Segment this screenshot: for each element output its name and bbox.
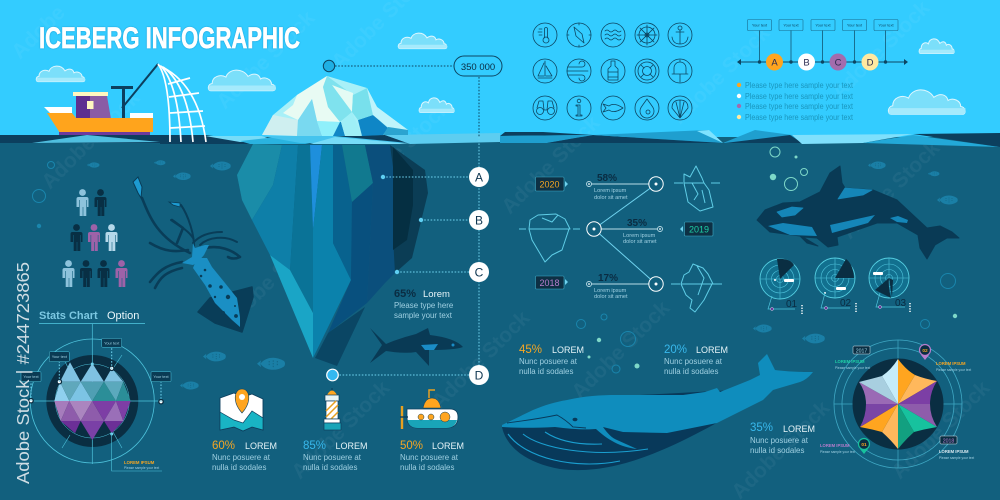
legend list: Please type here sample your text (745, 92, 854, 101)
icon: compass (567, 23, 591, 47)
point C: C (475, 266, 484, 280)
tree chart: years and percentages: Lorem ipsum (594, 188, 627, 194)
icon: ship wheel (635, 23, 659, 47)
ocean background (0, 137, 1000, 500)
stat: 50%: nulla id sodales (400, 463, 454, 472)
radial star chart: Please sample your text (939, 456, 974, 460)
text block: 20%: 20% (664, 344, 687, 356)
timeline A B C D (737, 20, 908, 70)
timeline A B C D: D (867, 58, 874, 68)
point D: D (475, 368, 484, 382)
timeline A B C D: Your text (847, 22, 863, 28)
point A (381, 167, 489, 187)
text block: 35%: 35% (750, 422, 773, 434)
tree chart: years and percentages: 2019 (689, 224, 709, 234)
text block: 45% (519, 344, 584, 376)
tree chart: years and percentages: 17% (598, 273, 618, 284)
label: 350 000 (454, 56, 502, 76)
radial star chart: Please sample your text (835, 366, 870, 370)
icon: life ring (635, 59, 659, 83)
legend list: Please type here sample your text (745, 113, 854, 122)
text block: 65% Lorem (394, 288, 454, 320)
text block: 45%: Nunc posuere at (519, 357, 578, 366)
stat: 50%: 50% (400, 440, 423, 452)
sky background (0, 0, 1000, 137)
text block: 20%: nulla id sodales (664, 367, 718, 376)
radar 02: 02 (840, 298, 852, 309)
icon: shell (668, 96, 692, 120)
watermark: Adobe Stock (837, 136, 945, 244)
timeline A B C D: Your text (815, 22, 832, 28)
stat: 60%: 60% (212, 440, 235, 452)
watermark: Adobe Stock (37, 86, 145, 194)
tuna (370, 328, 463, 366)
stat: 50%: LOREM (432, 441, 464, 451)
iceberg outline left (519, 214, 580, 262)
watermark: Adobe Stock (887, 376, 995, 484)
radial iceberg stats chart: Your text (52, 354, 68, 359)
legend list (737, 81, 854, 122)
stock watermark vertical: Adobe Stock | #244723865 (13, 262, 33, 484)
orca (757, 166, 959, 259)
cloud 3 (398, 33, 447, 49)
stat: 60%: LOREM (245, 441, 277, 451)
icon: map (220, 389, 263, 431)
radial iceberg stats chart: Your text (23, 374, 40, 379)
stat: 50% (400, 440, 464, 472)
tree chart: years and percentages: 58% (597, 173, 617, 184)
radial star chart: LOREM IPSUM (939, 449, 969, 454)
radial star chart: LOREM IPSUM (820, 443, 850, 448)
radar 03: 03 (895, 298, 907, 309)
tree chart: years and percentages: dolor sit amet (594, 294, 628, 300)
radial star chart: 01 (861, 442, 867, 448)
radar 01 (760, 259, 802, 314)
label: 350 000: 350 000 (461, 62, 495, 73)
stat: 60%: nulla id sodales (212, 463, 266, 472)
point B: B (475, 214, 483, 228)
stat: 85%: 85% (303, 440, 326, 452)
radial star chart: LOREM IPSUM (936, 361, 966, 366)
text block: 65% Lorem: Please type here (394, 301, 454, 310)
cloud 6 (888, 90, 965, 114)
text block: 65% Lorem: sample your text (394, 311, 453, 320)
radial iceberg stats chart: Please sample your text (124, 466, 159, 470)
iceberg outline top (674, 166, 720, 211)
icon: sailboat (533, 59, 557, 83)
watermark: Adobe Stock (212, 6, 320, 114)
watermark: Adobe Stock (427, 306, 535, 414)
fishing boat with net (44, 64, 206, 142)
radar 03 (869, 258, 910, 312)
radar 02 (815, 258, 856, 312)
stats chart heading: Option (107, 310, 139, 322)
icon: info (567, 96, 591, 120)
tree chart: years and percentages: 2018 (539, 278, 560, 288)
timeline A B C D: C (835, 58, 842, 68)
title: ICEBERG INFOGRAPHIC (39, 22, 300, 55)
icon: lighthouse (324, 388, 341, 430)
watermark: Adobe Stock (217, 226, 325, 334)
text block: 35%: Nunc posuere at (750, 436, 809, 445)
radial iceberg stats chart: Your text (153, 374, 170, 379)
radial star chart (820, 340, 974, 468)
text block: 20%: Nunc posuere at (664, 357, 723, 366)
radial iceberg stats chart: Your text (104, 340, 120, 346)
icon: anchor (668, 23, 692, 47)
blue whale (502, 354, 813, 470)
watermark: Adobe Stock (497, 111, 605, 219)
timeline A B C D: Your text (878, 22, 895, 28)
cloud 5 (919, 39, 954, 53)
text block: 20% (664, 344, 728, 376)
timeline A B C D: B (803, 58, 810, 68)
stat: 85%: LOREM (336, 441, 368, 451)
stat: 50%: Nunc posuere at (400, 453, 459, 462)
small fish group (87, 160, 958, 390)
tree chart: years and percentages (536, 173, 713, 300)
tree chart: years and percentages: 35% (627, 218, 647, 229)
tree chart: years and percentages: Lorem ipsum (623, 233, 656, 239)
text block: 20%: LOREM (696, 345, 728, 355)
watermark: Adobe Stock (287, 376, 395, 484)
icon grid: ocean symbols (533, 23, 692, 120)
radial star chart: 2018 (943, 438, 954, 444)
watermark: Adobe (7, 1, 70, 64)
water surface band (0, 130, 1000, 147)
text block: 65% Lorem: 65% (394, 288, 416, 300)
text block: 45%: 45% (519, 344, 542, 356)
radial star chart: 2017 (856, 348, 867, 354)
radial star chart: Please sample your text (820, 450, 855, 454)
tree chart: years and percentages: dolor sit amet (594, 195, 628, 201)
people icons (62, 189, 128, 287)
stat: 85%: nulla id sodales (303, 463, 357, 472)
radial iceberg stats chart: LOREM IPSUM (124, 460, 155, 465)
text block: 35%: nulla id sodales (750, 446, 804, 455)
cloud 4 (419, 98, 454, 112)
point B (419, 210, 489, 230)
icon: binoculars (533, 96, 557, 120)
text block: 65% Lorem: Lorem (423, 289, 450, 300)
point D (327, 365, 489, 385)
icon: bottle (601, 59, 625, 83)
cloud 1 (36, 66, 85, 82)
radial star chart: Please sample your text (936, 368, 971, 372)
timeline A B C D: A (771, 58, 778, 68)
icon: submarine (400, 390, 458, 429)
bubbles (32, 147, 957, 373)
squid (133, 177, 253, 332)
point C (395, 262, 489, 282)
stats chart heading (39, 310, 145, 324)
watermark: Adobe Stock (567, 296, 675, 404)
stat: 85%: Nunc posuere at (303, 453, 362, 462)
stat: 85% (303, 440, 368, 472)
stat: 60% (212, 440, 277, 472)
icon: water drop (635, 96, 659, 120)
iceberg tip (262, 76, 408, 136)
iceberg underwater (237, 144, 428, 366)
icon: bell (668, 59, 692, 83)
timeline A B C D: Your text (752, 22, 768, 28)
radial star chart: 02 (922, 348, 928, 354)
watermark: Adobe Stock (347, 96, 455, 204)
icon: thermometer (533, 23, 557, 47)
legend list: Please type here sample your text (745, 102, 854, 111)
text block: 35%: LOREM (783, 424, 815, 434)
radar 01: 01 (786, 299, 798, 310)
legend list: Please type here sample your text (745, 81, 854, 90)
iceberg outline bottom (671, 264, 722, 312)
watermark: Adobe Stock (667, 21, 775, 129)
dotted connector lines (333, 66, 479, 375)
stats chart heading: Stats Chart (39, 310, 98, 322)
icon: wind (567, 59, 591, 83)
tree chart: years and percentages: Lorem ipsum (594, 288, 627, 294)
radial star chart: LOREM IPSUM (835, 359, 865, 364)
timeline A B C D: Your text (783, 22, 800, 28)
tree chart: years and percentages: dolor sit amet (623, 239, 657, 245)
text block: 45%: nulla id sodales (519, 367, 573, 376)
radial iceberg stats chart (21, 324, 171, 471)
stat: 60%: Nunc posuere at (212, 453, 271, 462)
tree chart: years and percentages: 2020 (539, 180, 560, 190)
point A: A (475, 170, 483, 184)
marker: top of iceberg (323, 60, 335, 72)
cloud 2 (208, 70, 276, 91)
icon: waves (601, 23, 625, 47)
text block: 35% (750, 422, 815, 455)
text block: 45%: LOREM (552, 345, 584, 355)
icon: fish (601, 96, 625, 120)
